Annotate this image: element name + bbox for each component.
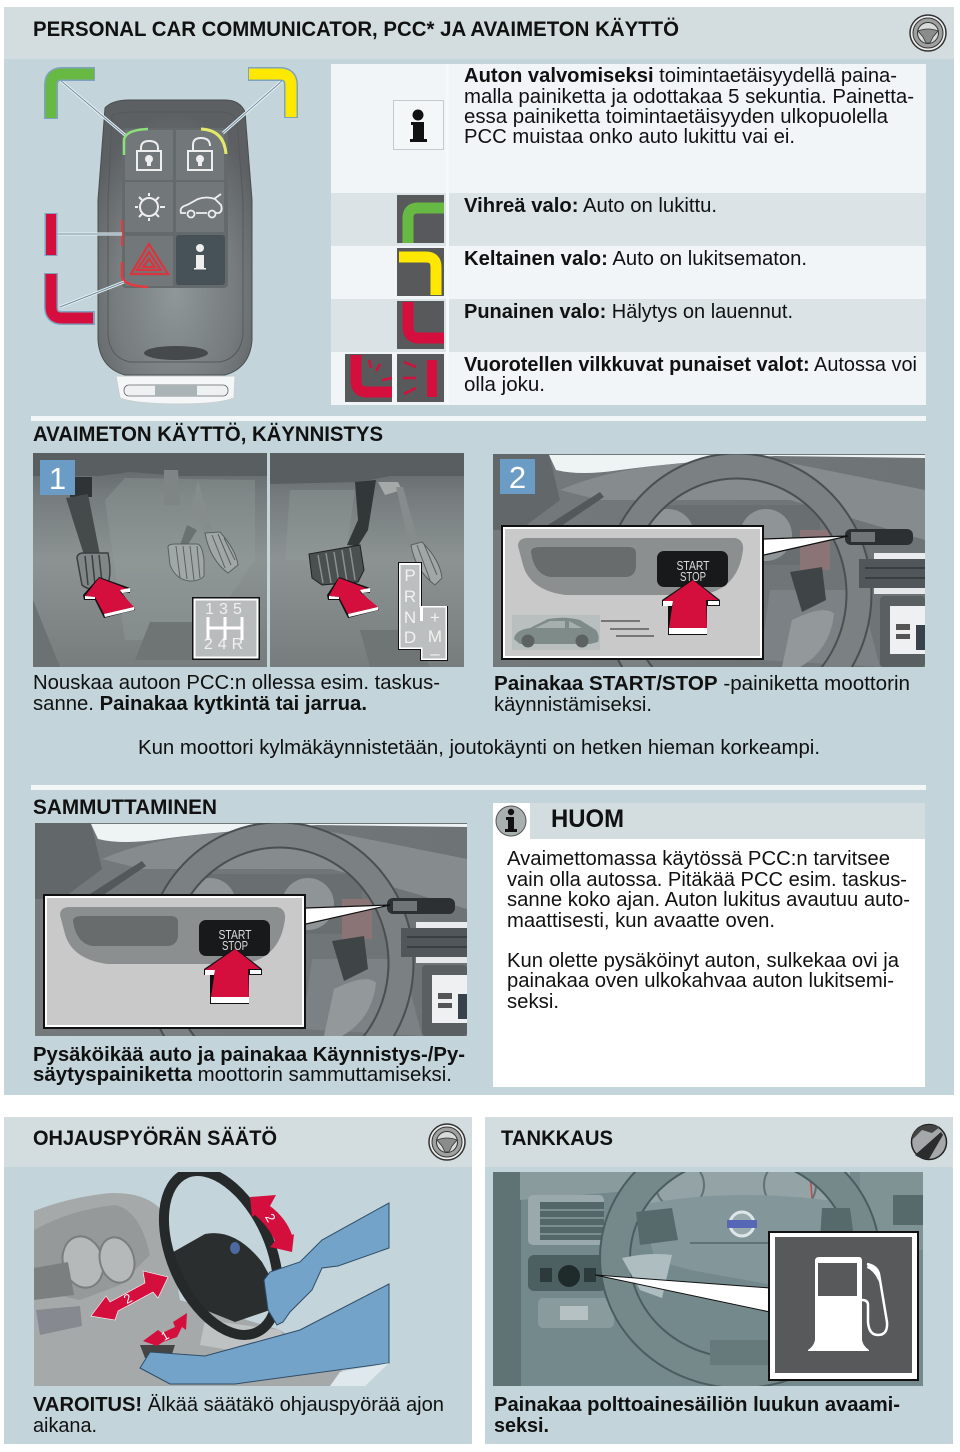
vent: [528, 1195, 604, 1245]
icon: info box: [394, 100, 444, 150]
led arcs: [124, 129, 148, 155]
arrow: [83, 577, 135, 618]
text: switching off: [33, 1044, 465, 1086]
icon: green light: [397, 195, 444, 243]
text: switching off: Pysäköikää auto ja painakaa Käynnistys-/Py-: [33, 1044, 465, 1066]
dashboard: [34, 1193, 365, 1386]
text block: monitoring instructions: malla painiketta ja odottakaa 5 sekuntia. Painetta-: [464, 86, 914, 108]
text: step 2: käynnistämiseksi.: [494, 694, 652, 716]
text: red light: Punainen valo: Hälytys on lauennut.: [464, 301, 793, 323]
arrow: [327, 577, 379, 618]
heading: note: HUOM: [551, 805, 624, 833]
logo: [727, 1212, 757, 1236]
photo: dashboard fuel button: [493, 1172, 923, 1386]
arms: [264, 1203, 389, 1325]
icon: yellow light: [397, 248, 444, 296]
gear diagram automatic: [398, 562, 448, 663]
button label: STOP: [222, 938, 248, 953]
photo: stop dashboard: [35, 823, 467, 1091]
steering hub: [644, 1195, 834, 1284]
key fob illustration: [98, 100, 252, 404]
heading: refuelling: TANKKAUS: [501, 1127, 613, 1150]
arrow: up down: 2: [262, 1211, 279, 1225]
heading: keyless start: AVAIMETON KÄYTTÖ, KÄYNNISTYS: [33, 423, 383, 446]
text: note body: seksi.: [507, 991, 559, 1013]
fob body: [98, 100, 252, 375]
callout brackets with leader lines: [51, 74, 291, 318]
text: switching off: säytyspainiketta moottorin sammuttamiseksi.: [33, 1064, 452, 1086]
icon: red light: [397, 301, 444, 349]
button label: [218, 927, 252, 953]
text block: monitoring instructions: PCC muistaa onko auto lukittu vai ei.: [464, 126, 795, 148]
gear diagram automatic: M: [428, 627, 442, 646]
icon: alternating red lights: [345, 354, 444, 402]
icon: info button: [194, 244, 206, 270]
text: cold start note: Kun moottori kylmäkäynnistetään, joutokäynti on hetken hieman korkeampi.: [138, 737, 820, 759]
speed lines: [601, 621, 654, 636]
light switch panel: [528, 1255, 606, 1291]
text: alternating lights: olla joku.: [464, 374, 545, 396]
icon: road: [912, 1124, 946, 1160]
panel: steering wheel adjustment: [4, 1117, 472, 1444]
title: PERSONAL CAR COMMUNICATOR, PCC* JA AVAIMETON KÄYTTÖ: [33, 18, 679, 41]
arrow: lever: [143, 1313, 187, 1346]
panel: refuelling: [485, 1117, 953, 1444]
text: note body: maattisesti, kun avaatte oven.: [507, 910, 775, 932]
button label: START: [676, 558, 710, 573]
button label: STOP: [680, 569, 706, 584]
icon: unlocked: [188, 138, 212, 170]
illustration: steering wheel adjustment: [34, 1154, 389, 1386]
button label: [676, 558, 710, 584]
badge: step 2: [500, 459, 535, 495]
gear diagram automatic: –: [430, 644, 440, 663]
icon: fuel pump: [808, 1257, 887, 1351]
text: yellow light: Keltainen valo: Auto on lukitsematon.: [464, 248, 807, 270]
gear diagram manual: 24R: [204, 636, 248, 653]
text: warning: VAROITUS! Älkää säätäkö ohjauspyörää ajon: [33, 1394, 444, 1416]
text: alternating lights: [464, 354, 917, 396]
badge: step 2: 2: [509, 460, 526, 495]
text: refuelling: seksi.: [494, 1415, 549, 1437]
gear diagram manual: 135: [205, 601, 247, 618]
photo: brake pedal: [270, 453, 464, 667]
icon: info circle: [496, 806, 526, 836]
gear diagram automatic: P: [404, 566, 416, 585]
text: note body: vain olla autossa. Pitäkää PCC esim. taskus-: [507, 869, 907, 891]
main panel background: [4, 7, 954, 1095]
key blade: [116, 376, 235, 404]
wheel: [174, 1233, 268, 1322]
text: step 2: Painakaa START/STOP -painiketta moottorin: [494, 673, 910, 695]
heading: steering wheel adjustment: OHJAUSPYÖRÄN SÄÄTÖ: [33, 1127, 277, 1150]
arrow: lever: 1: [159, 1328, 172, 1344]
text block: monitoring instructions: Auton valvomiseksi toimintaetäisyydellä paina-: [464, 65, 897, 87]
icon: steering wheel top: [910, 15, 946, 51]
arrow: up down: [250, 1195, 294, 1252]
icon: locked: [137, 141, 161, 170]
arrow: depth: 2: [121, 1290, 135, 1307]
gear diagram manual: [192, 597, 260, 660]
icon: steering wheel: [429, 1124, 465, 1160]
fuel inset: [768, 1231, 919, 1381]
gear diagram automatic: N: [404, 608, 416, 627]
text: note body: Avaimettomassa käytössä PCC:n tarvitsee: [507, 848, 890, 870]
text: step 1: sanne. Painakaa kytkintä tai jarrua.: [33, 693, 367, 715]
text block: monitoring instructions: essa painiketta toimintaetäisyyden ulkopuolella: [464, 106, 889, 128]
text: note body: painakaa oven ulkokahvaa auton lukitsemi-: [507, 970, 894, 992]
car thumbnail: [512, 615, 600, 650]
badge: step 1: [40, 460, 75, 496]
panel: light status table: [331, 64, 926, 405]
text: alternating lights: Vuorotellen vilkkuvat punaiset valot: Autossa voi: [464, 354, 917, 376]
badge: step 1: 1: [49, 461, 66, 496]
text block: monitoring instructions: [464, 65, 914, 148]
text: refuelling: [494, 1394, 900, 1437]
text: note body: sanne koko ajan. Auton lukitus avautuu auto-: [507, 889, 910, 911]
text: step 2: [494, 673, 910, 716]
icon: hazard triangle: [131, 244, 168, 274]
text: step 1: [33, 672, 440, 715]
text: step 1: Nouskaa autoon PCC:n ollessa esim. taskus-: [33, 672, 440, 694]
gear diagram automatic: D: [404, 628, 416, 647]
icon: trunk car: [181, 194, 222, 218]
panel: note: [493, 803, 925, 1087]
text: warning: aikana.: [33, 1415, 97, 1437]
icon: approach light: [135, 193, 165, 221]
gear diagram automatic: R: [404, 587, 416, 606]
arrow: depth: [91, 1271, 168, 1320]
text: warning: [33, 1394, 444, 1437]
pointer: [595, 1275, 770, 1312]
photo: clutch pedals: [33, 453, 267, 667]
text: green light: Vihreä valo: Auto on lukittu.: [464, 195, 717, 217]
gear diagram automatic: +: [430, 608, 440, 627]
button label: START: [218, 927, 252, 942]
heading: switching off: SAMMUTTAMINEN: [33, 796, 217, 819]
photo: start stop dashboard: [493, 454, 925, 722]
text: note body: [507, 848, 910, 1013]
text: note body: Kun olette pysäköinyt auton, sulkekaa ovi ja: [507, 950, 900, 972]
text: refuelling: Painakaa polttoainesäiliön luukun avaami-: [494, 1394, 900, 1416]
